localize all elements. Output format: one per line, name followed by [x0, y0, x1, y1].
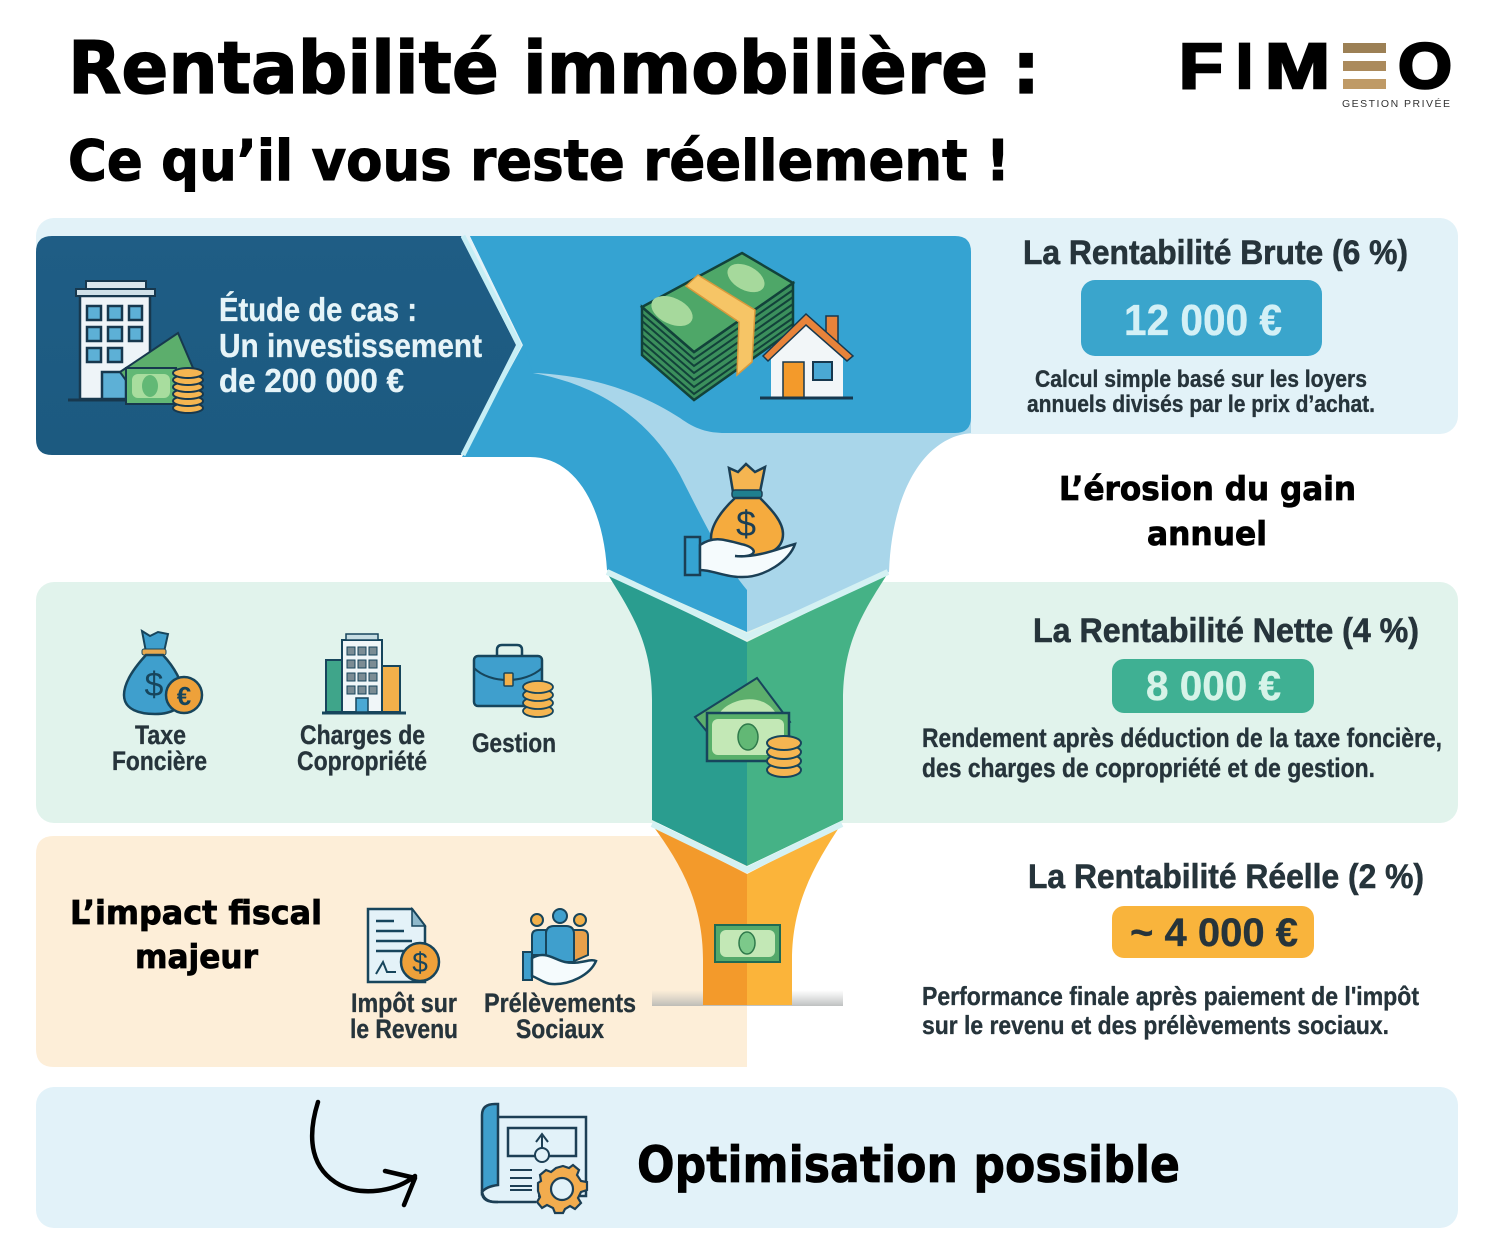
heading: impact fiscal: majeur — [135, 937, 259, 976]
icon: banknote — [715, 925, 780, 962]
item: impôt sur le revenu: le Revenu — [350, 1014, 458, 1044]
logo: FIMEO: O — [1398, 30, 1452, 102]
heading: érosion du gain: annuel — [1147, 514, 1267, 553]
item: prélèvements sociaux: Prélèvements — [484, 988, 636, 1018]
text: performance réelle: sur le revenu et des prélèvements sociaux. — [922, 1010, 1389, 1040]
logo: FIMEO: F — [1179, 30, 1223, 102]
arrow outline — [463, 236, 519, 455]
icon: office building with cash — [68, 281, 203, 413]
text: calcul brute — [1027, 366, 1375, 418]
logo: FIMEO: GESTION PRIVÉE — [1342, 97, 1450, 110]
item: impôt sur le revenu: Impôt sur — [351, 988, 457, 1018]
item: charges de copropriété: Charges de — [300, 720, 425, 750]
panel: rentabilité brute background — [36, 218, 1458, 434]
subtitle: Ce qu’il vous reste réellement ! — [68, 129, 1010, 194]
text: rendement nette: des charges de copropriété et de gestion. — [922, 753, 1375, 783]
text: étude de cas: Un investissement — [219, 327, 482, 364]
panel: étude de cas arrow — [36, 236, 516, 455]
funnel: base shadow — [652, 990, 843, 1006]
funnel: green section — [747, 573, 888, 866]
title: Rentabilité immobilière : — [68, 26, 1040, 110]
value pill: 8 000 € — [1112, 659, 1314, 713]
heading: érosion du gain: L’érosion du gain — [1059, 469, 1356, 508]
item: gestion: Gestion — [472, 728, 556, 758]
value pill: 12 000 €: 12 000 € — [1124, 296, 1282, 345]
funnel — [462, 236, 971, 1006]
item: taxe foncière: € — [177, 681, 191, 711]
text: étude de cas: de 200 000 € — [219, 362, 404, 399]
item: impôt sur le revenu: $ — [412, 947, 428, 978]
item: impôt sur le revenu — [350, 909, 458, 1044]
heading: rentabilité nette: La Rentabilité Nette (4 %) — [1033, 612, 1419, 650]
item: taxe foncière: $ — [145, 666, 164, 704]
icon: money bag in hand: $ — [736, 503, 756, 544]
item: charges de copropriété: Copropriété — [297, 746, 427, 776]
logo: FIMEO: I — [1236, 30, 1253, 102]
text: étude de cas: Étude de cas : — [219, 291, 417, 328]
panel: impact fiscal background — [36, 836, 747, 1067]
text: calcul brute: Calcul simple basé sur les loyers — [1035, 366, 1367, 393]
heading: érosion du gain — [1059, 469, 1356, 553]
text: étude de cas — [219, 291, 482, 399]
funnel: top block with swoosh — [470, 236, 971, 433]
item: charges de copropriété — [297, 634, 427, 776]
text: calcul brute: annuels divisés par le prix d’achat. — [1027, 391, 1375, 418]
item: gestion — [472, 645, 556, 758]
value pill: 8 000 €: 8 000 € — [1146, 662, 1281, 709]
funnel: base stem front — [703, 985, 747, 1005]
item: prélèvements sociaux: Sociaux — [516, 1014, 604, 1044]
heading: rentabilité brute: La Rentabilité Brute (6 %) — [1023, 234, 1408, 272]
icon: money bag in hand — [685, 464, 795, 577]
value pill: 4 000 €: ~ 4 000 € — [1130, 911, 1298, 955]
value pill: 12 000 € — [1081, 280, 1322, 356]
heading: impact fiscal: L’impact fiscal — [70, 893, 322, 932]
panel: rentabilité nette background — [36, 582, 1458, 823]
funnel: teal section — [607, 573, 747, 866]
funnel: separators — [607, 572, 888, 870]
funnel: white neck backdrop — [468, 434, 971, 582]
funnel: orange section — [653, 826, 747, 1005]
heading: rentabilité réelle: La Rentabilité Réelle (2 %) — [1028, 858, 1424, 896]
text: performance réelle: Performance finale après paiement de l'impôt — [922, 981, 1419, 1011]
heading: optimisation possible: Optimisation possible — [637, 1136, 1180, 1194]
arrow: curved to optimisation — [312, 1102, 415, 1205]
panel: optimisation background — [36, 1087, 1458, 1228]
icon: money stack with house — [642, 253, 853, 400]
item: taxe foncière — [112, 631, 207, 776]
item: taxe foncière: Taxe — [135, 720, 186, 750]
funnel: dark blue section — [462, 236, 747, 632]
icon: plan with gear — [482, 1104, 587, 1213]
icon: cash with coins — [695, 678, 801, 777]
text: performance réelle — [922, 981, 1419, 1040]
text: rendement nette — [922, 723, 1442, 783]
logo: FIMEO — [1179, 30, 1452, 110]
heading: impact fiscal — [70, 893, 322, 976]
item: prélèvements sociaux — [484, 909, 636, 1044]
funnel: light blue section — [533, 373, 971, 632]
item: taxe foncière: Foncière — [112, 746, 207, 776]
logo: FIMEO: M — [1265, 30, 1330, 102]
funnel: yellow section — [747, 826, 840, 1005]
